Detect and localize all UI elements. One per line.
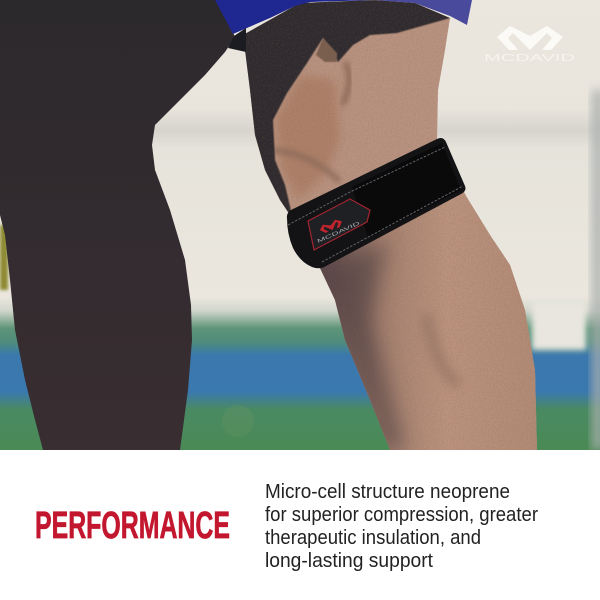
red M mark (318, 218, 344, 234)
strap body (287, 138, 466, 268)
blurred sports-court background (0, 0, 600, 450)
left leg in shadow (0, 0, 235, 450)
strap logo badge (308, 199, 370, 250)
description text: Micro-cell structure neoprene (265, 481, 510, 503)
heading: PERFORMANCE (35, 505, 230, 547)
McDavid logo (484, 26, 575, 64)
white caption panel (0, 450, 600, 600)
right leg (225, 0, 545, 450)
strap wordmark: MCDAVID (316, 220, 362, 245)
description text: long-lasting support (265, 550, 433, 572)
description text: for superior compression, greater (265, 504, 538, 526)
photo: athlete wearing knee strap (0, 0, 600, 450)
description text (265, 481, 538, 572)
description text: therapeutic insulation, and (265, 527, 481, 549)
knee strap (287, 138, 466, 268)
stitching (288, 147, 445, 225)
shadow across thigh and inner knee (245, 0, 450, 212)
shorts (215, 0, 472, 52)
logo mark (497, 26, 563, 50)
logo wordmark: MCDAVID (484, 53, 575, 64)
